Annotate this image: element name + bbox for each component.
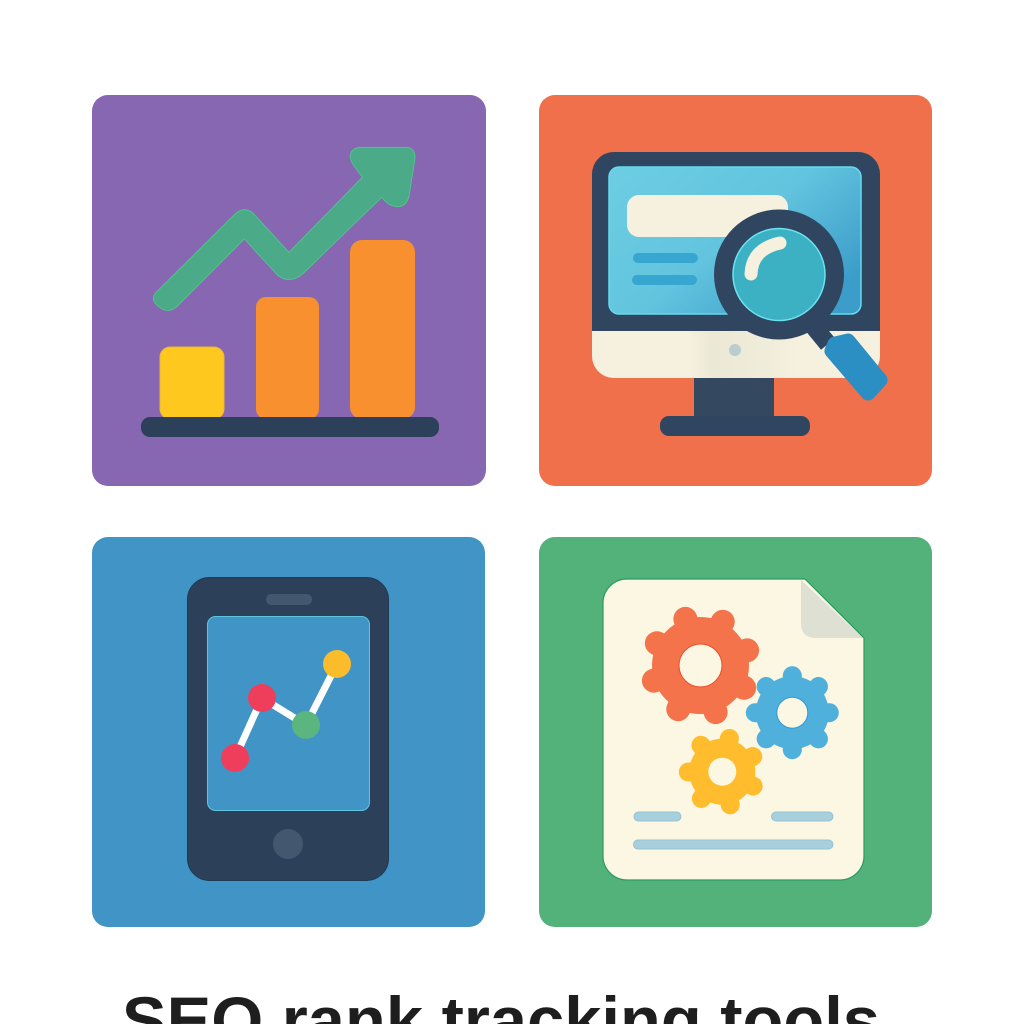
- icon: trend arrow: [153, 147, 415, 310]
- icon: document: [603, 579, 864, 880]
- document text lines: [634, 812, 833, 849]
- icon: tall orange bar: [350, 240, 415, 419]
- monitor screen: [609, 167, 861, 314]
- phone home button: [273, 829, 303, 859]
- icon: phone body: [188, 578, 388, 880]
- infographic canvas: [92, 95, 932, 1024]
- icon: yellow gear: [688, 738, 755, 805]
- panel: rising chart: [92, 95, 486, 486]
- text line: [632, 275, 697, 285]
- document folded corner: [801, 580, 863, 638]
- text line: [633, 253, 698, 263]
- icon: monitor body: [592, 152, 880, 378]
- panel: technical settings: [539, 537, 932, 927]
- icon: yellow bar: [160, 347, 224, 419]
- panel: mobile analytics: [92, 537, 485, 927]
- phone screen: [208, 616, 370, 810]
- icon: blue gear: [755, 676, 829, 750]
- panel: website audit: [539, 95, 932, 486]
- bar chart baseline: [141, 417, 439, 437]
- icon: red gear: [652, 617, 749, 714]
- icon: medium orange bar: [256, 297, 319, 419]
- search box: [627, 195, 788, 237]
- icon: monitor stand: [660, 376, 810, 436]
- line chart: [221, 650, 351, 772]
- phone speaker: [266, 594, 312, 605]
- icon: magnifying glass: [714, 210, 880, 393]
